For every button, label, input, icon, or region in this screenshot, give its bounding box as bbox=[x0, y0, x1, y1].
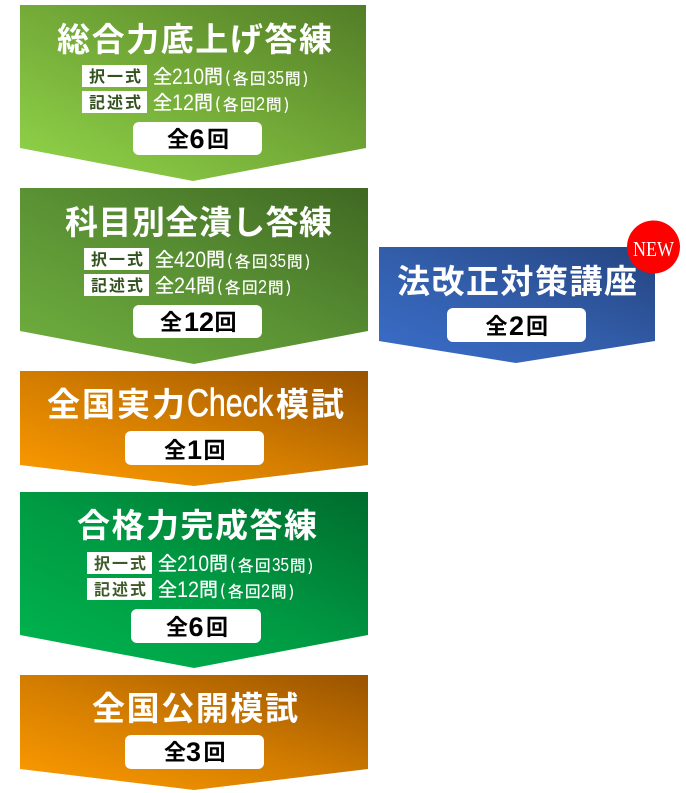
記述式 row: 各回 bbox=[228, 580, 261, 602]
択一式 row: 35 bbox=[272, 555, 289, 575]
記述式 row: 記述式 bbox=[94, 576, 146, 600]
記述式 row: 問) bbox=[271, 580, 294, 602]
択一式 row bbox=[82, 62, 308, 89]
択一式 row: 択一式 bbox=[91, 246, 143, 270]
count badge: 全2回 bbox=[447, 308, 586, 342]
count badge: 全6回 bbox=[131, 609, 261, 643]
記述式 row: 問) bbox=[266, 93, 289, 115]
択一式 row: 問 bbox=[204, 62, 223, 89]
heading: 総合力底上げ答練: 総合力底上げ答練 bbox=[57, 13, 332, 61]
択一式 row: 問 bbox=[209, 549, 228, 576]
heading: 全国実力Check模試: Check bbox=[187, 382, 273, 425]
記述式 row: 問 bbox=[194, 88, 213, 115]
記述式 row: 記述式 bbox=[89, 89, 141, 113]
記述式 row: 12 bbox=[177, 577, 199, 602]
択一式 row: 択一式 bbox=[89, 63, 141, 87]
heading: 法改正対策講座: 法改正対策講座 bbox=[397, 255, 637, 303]
択一式 row: 210 bbox=[177, 551, 209, 576]
badge: NEW bbox=[627, 220, 680, 274]
heading: 科目別全潰し答練: 科目別全潰し答練 bbox=[65, 196, 332, 244]
択一式 row: 420 bbox=[174, 247, 206, 272]
count badge: 全3回: 3 bbox=[186, 737, 201, 767]
count badge: 全12回 bbox=[133, 305, 262, 338]
記述式 row: 2 bbox=[256, 94, 265, 114]
択一式 row bbox=[87, 549, 313, 576]
択一式 row: 問) bbox=[285, 67, 308, 89]
択一式 row: 35 bbox=[269, 251, 286, 271]
択一式 row bbox=[84, 245, 310, 272]
count badge: 全6回: 6 bbox=[188, 612, 204, 642]
heading: 合格力完成答練: 合格力完成答練 bbox=[77, 499, 317, 547]
count badge: 全1回 bbox=[125, 431, 264, 465]
記述式 row: ( bbox=[220, 579, 225, 601]
記述式 row: ( bbox=[217, 275, 222, 297]
badge: NEW: NEW bbox=[633, 237, 674, 261]
記述式 row: 2 bbox=[258, 277, 267, 297]
count badge: 全3回 bbox=[125, 735, 264, 769]
count badge: 全2回: 全 bbox=[486, 309, 508, 341]
択一式 row: 問) bbox=[290, 554, 313, 576]
count badge: 全12回: 全 bbox=[160, 305, 182, 337]
記述式 row: 問) bbox=[268, 276, 291, 298]
択一式 row: ( bbox=[230, 553, 235, 575]
heading: 全国実力Check模試: 全国実力 bbox=[47, 378, 185, 426]
択一式 row: 全 bbox=[158, 549, 177, 576]
count badge: 全6回: 回 bbox=[206, 610, 228, 642]
記述式 row: 2 bbox=[261, 581, 270, 601]
count badge: 全12回: 12 bbox=[184, 307, 214, 337]
count badge: 全12回: 回 bbox=[214, 305, 237, 337]
count badge: 全6回: 回 bbox=[207, 122, 229, 154]
択一式 row: 問) bbox=[287, 250, 310, 272]
count badge: 全3回: 回 bbox=[204, 735, 226, 767]
heading: 全国公開模試: 全国公開模試 bbox=[92, 682, 298, 730]
panel: 法改正対策講座 bbox=[379, 220, 680, 363]
記述式 row: ( bbox=[215, 92, 220, 114]
panel: 全国実力Check模試 bbox=[20, 371, 368, 486]
count badge: 全6回: 全 bbox=[166, 610, 188, 642]
count badge: 全2回: 回 bbox=[526, 309, 548, 341]
択一式 row: 35 bbox=[267, 68, 284, 88]
記述式 row: 全 bbox=[153, 88, 172, 115]
択一式 row: 各回 bbox=[235, 250, 268, 272]
記述式 row bbox=[82, 88, 289, 115]
panel: 総合力底上げ答練 bbox=[20, 5, 366, 181]
記述式 row: 問 bbox=[196, 271, 215, 298]
択一式 row: 210 bbox=[172, 64, 204, 89]
count badge: 全1回: 1 bbox=[187, 435, 202, 465]
count badge: 全3回: 全 bbox=[164, 735, 186, 767]
記述式 row: 問 bbox=[199, 575, 218, 602]
択一式 row: 択一式 bbox=[94, 550, 146, 574]
count badge: 全6回 bbox=[133, 122, 262, 155]
択一式 row: 問 bbox=[206, 245, 225, 272]
択一式 row: ( bbox=[227, 249, 232, 271]
記述式 row: 12 bbox=[172, 90, 194, 115]
択一式 row: ( bbox=[225, 66, 230, 88]
記述式 row: 各回 bbox=[223, 93, 256, 115]
heading: 全国実力Check模試 bbox=[47, 378, 344, 426]
記述式 row: 記述式 bbox=[91, 272, 143, 296]
択一式 row: 全 bbox=[153, 62, 172, 89]
count badge: 全1回: 回 bbox=[204, 433, 226, 465]
記述式 row bbox=[87, 575, 294, 602]
count badge: 全6回: 6 bbox=[190, 124, 205, 154]
heading: 全国実力Check模試: 模試 bbox=[276, 378, 344, 426]
panel: 合格力完成答練 bbox=[20, 492, 368, 668]
記述式 row bbox=[84, 271, 291, 298]
択一式 row: 各回 bbox=[238, 554, 271, 576]
記述式 row: 全 bbox=[158, 575, 177, 602]
count badge: 全6回: 全 bbox=[167, 122, 189, 154]
記述式 row: 24 bbox=[174, 273, 196, 298]
panel: 科目別全潰し答練 bbox=[20, 188, 368, 364]
記述式 row: 全 bbox=[155, 271, 174, 298]
択一式 row: 各回 bbox=[233, 67, 266, 89]
count badge: 全2回: 2 bbox=[509, 311, 524, 341]
記述式 row: 各回 bbox=[225, 276, 258, 298]
count badge: 全1回: 全 bbox=[164, 433, 186, 465]
panel: 全国公開模試 bbox=[20, 675, 368, 790]
択一式 row: 全 bbox=[155, 245, 174, 272]
